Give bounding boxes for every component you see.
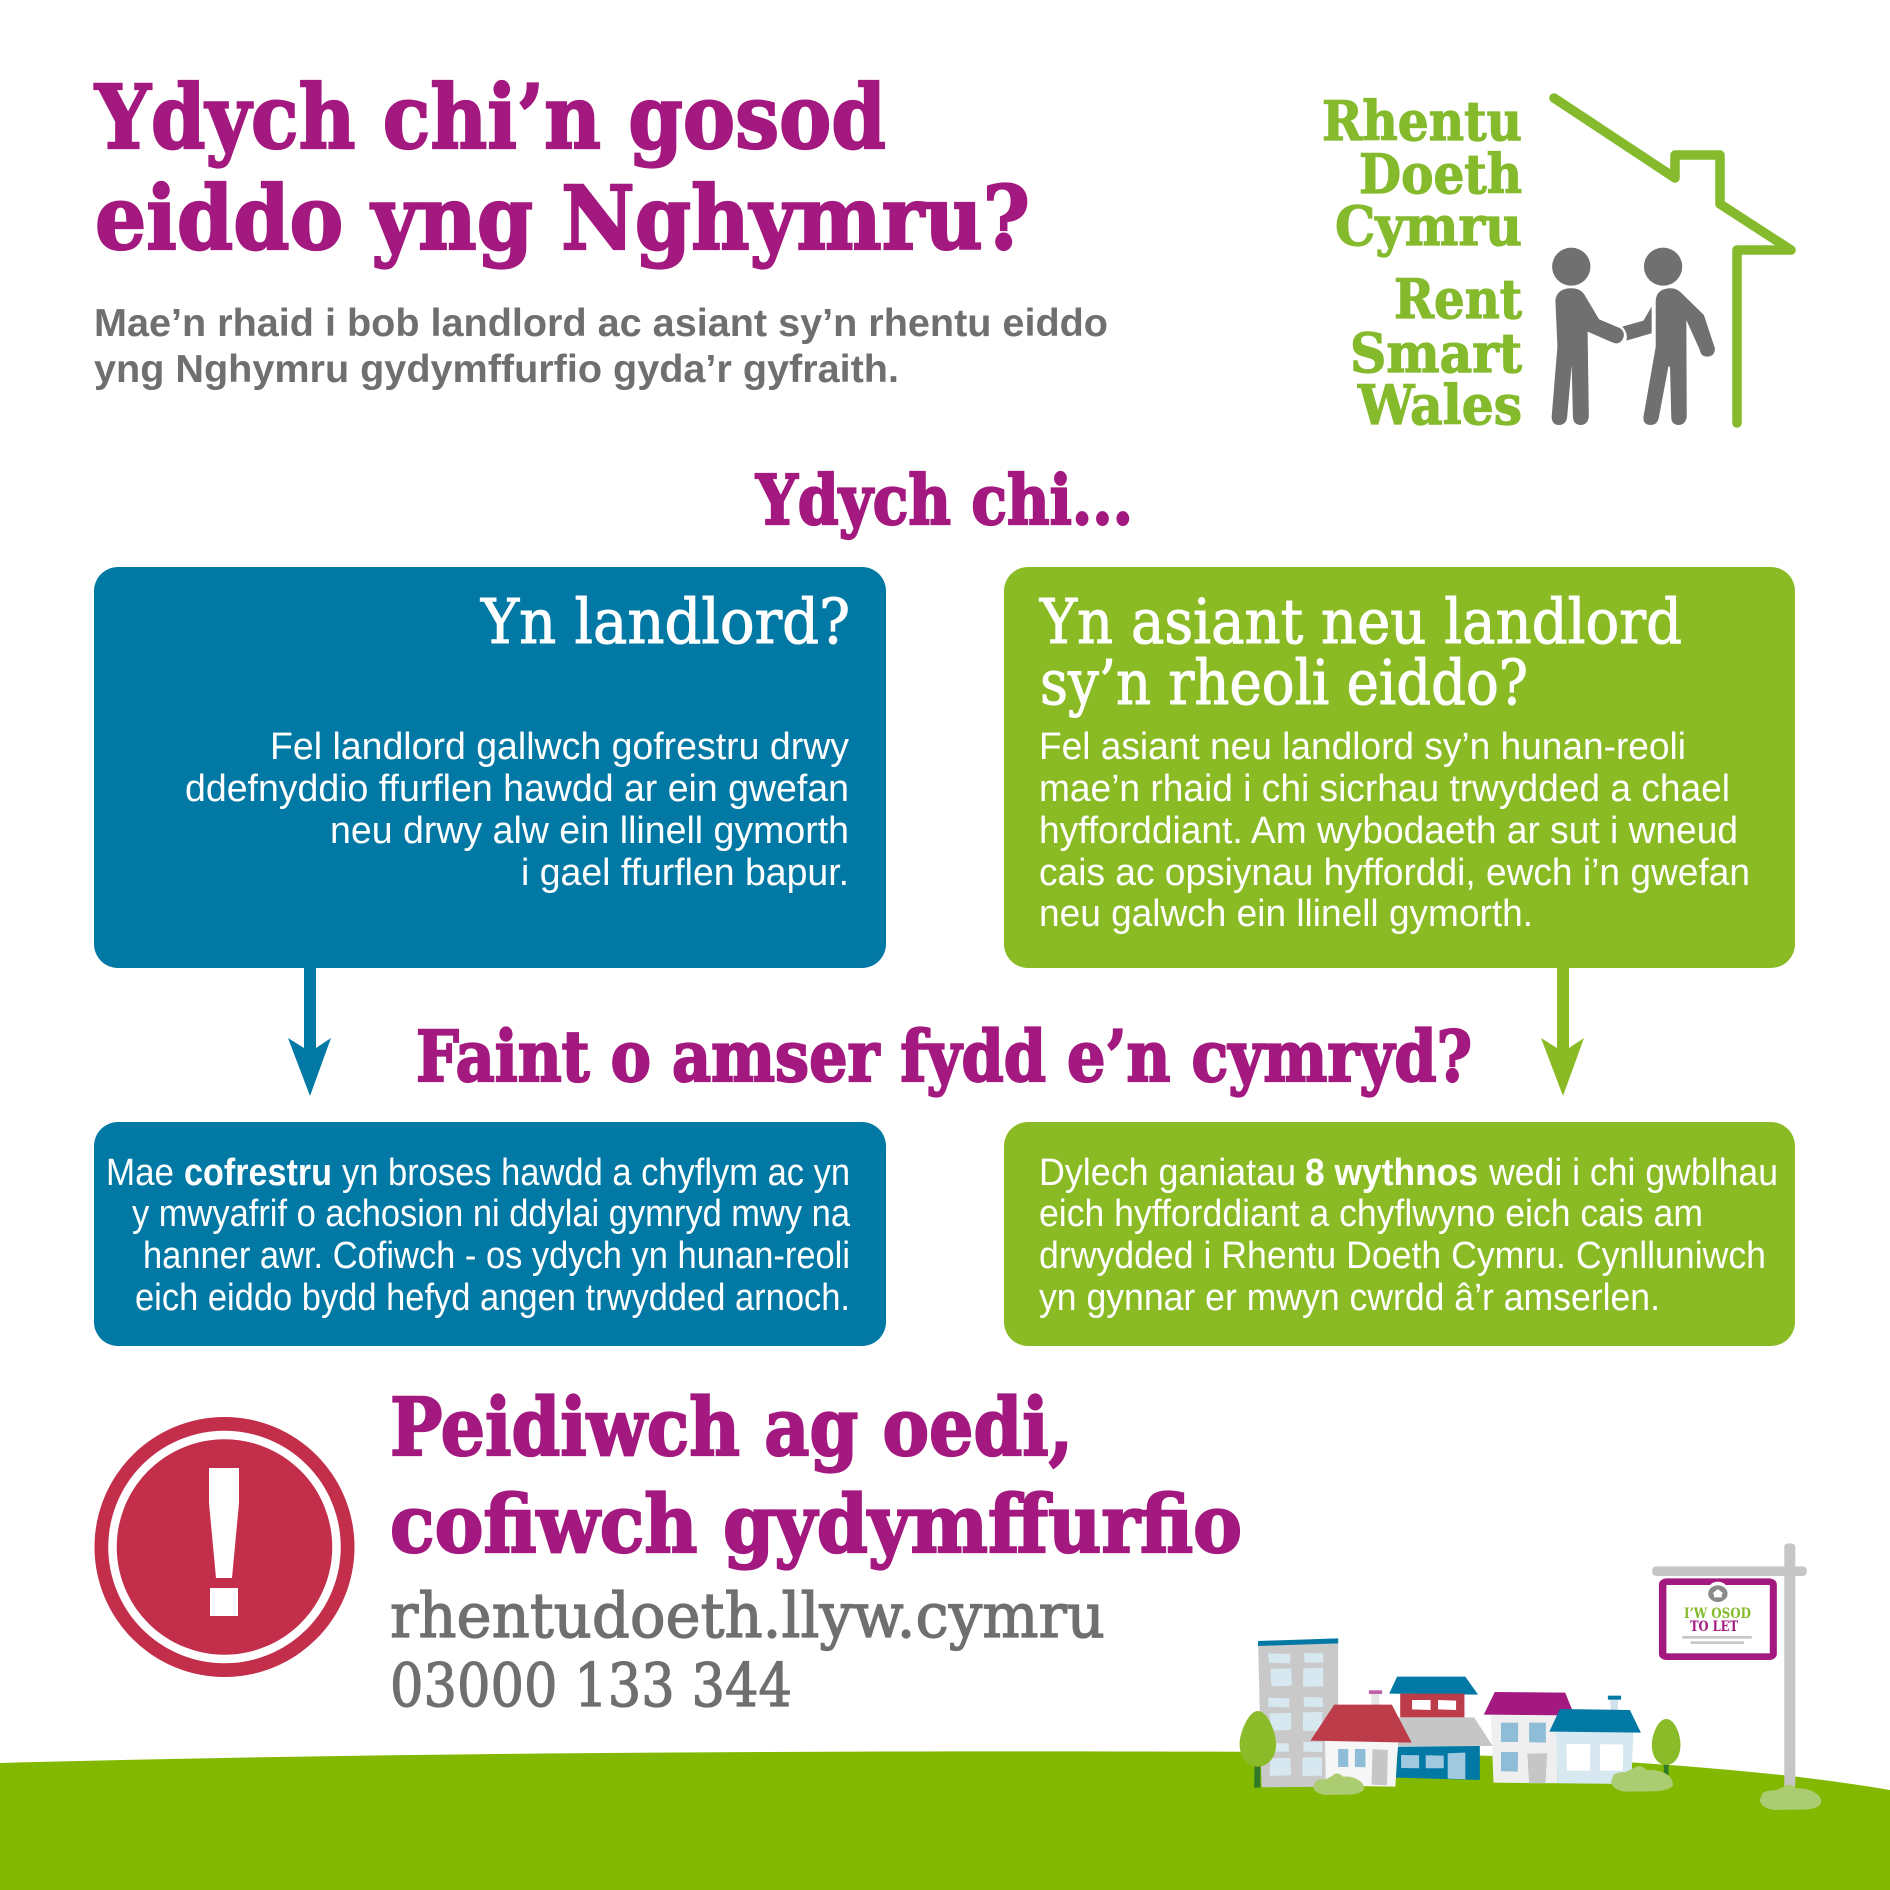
ground (0, 1751, 1890, 1890)
panel text: agent: neu galwch ein llinell gymorth. (1039, 893, 1533, 935)
heading: Peidiwch ag oedi: Peidiwch ag oedi, (390, 1380, 1073, 1474)
logo: Rhentu Doeth Cymru / Rent Smart Wales (1322, 89, 1791, 437)
panel text: landlord: ddefnyddio ffurflen hawdd ar ein gwefan (185, 768, 849, 810)
heading: Ydych chi...: Ydych chi... (755, 461, 1133, 541)
panel text: licence: yn gynnar er mwyn cwrdd â’r amserlen. (1039, 1277, 1660, 1319)
contact details: 03000 133 344 (390, 1651, 792, 1721)
logo text: Wales (1357, 373, 1522, 437)
blue and red building (1389, 1677, 1493, 1780)
panel heading: Yn asiant neu landlord (1039, 585, 1682, 719)
logo text: Cymru (1335, 194, 1522, 258)
heading: Peidiwch ag oedi (390, 1380, 1242, 1571)
illustration: town and sign (1240, 1543, 1821, 1810)
panel: agent (1004, 567, 1795, 968)
subtitle: Mae’n rhaid i bob landlord ac asiant sy’n rhentu eiddo (94, 302, 1108, 345)
arrow: blue (288, 968, 331, 1096)
panel text: registration: eich eiddo bydd hefyd angen trwydded arnoch. (135, 1277, 850, 1319)
blue house (1549, 1696, 1641, 1784)
panel text: registration: cofrestru (184, 1152, 332, 1194)
panel: landlord (94, 567, 886, 968)
panel text: licence: wedi i chi gwblhau (1488, 1152, 1778, 1194)
icon: house outline (1554, 98, 1791, 423)
panel text: agent: cais ac opsiynau hyfforddi, ewch i’n gwefan (1039, 852, 1750, 894)
title (94, 65, 1030, 270)
to let sign board (1659, 1578, 1777, 1660)
panel text: agent: Fel asiant neu landlord sy’n hunan-reoli (1039, 726, 1686, 768)
panel text: landlord: Fel landlord gallwch gofrestru drwy (270, 726, 849, 768)
title: eiddo yng Nghymru? (95, 166, 1030, 270)
panel text: agent (1039, 726, 1750, 935)
tree left (1240, 1711, 1276, 1788)
panel heading: Yn asiant neu landlord: Yn asiant neu landlord (1039, 585, 1682, 658)
panel text: registration (106, 1152, 851, 1319)
logo text: Rhentu (1322, 89, 1522, 153)
panel text: landlord (185, 726, 849, 894)
logo text: Rent (1394, 267, 1522, 331)
title: Ydych chi’n gosod (94, 65, 886, 169)
panel text: licence: eich hyfforddiant a chyflwyno eich cais am (1039, 1193, 1703, 1235)
heading: Faint o amser fydd e'n cymryd?: Faint o amser fydd e’n cymryd? (416, 1015, 1472, 1098)
panel text: registration: Mae (106, 1152, 174, 1194)
panel: licence time (1004, 1122, 1795, 1346)
panel text: landlord: i gael ffurflen bapur. (521, 852, 849, 894)
logo text: Smart (1350, 321, 1522, 385)
sign text (1684, 1606, 1751, 1635)
icon: warning exclamation (94, 1417, 354, 1677)
panel text: registration: y mwyafrif o achosion ni ddylai gymryd mwy na (132, 1193, 851, 1235)
panel text: agent: mae’n rhaid i chi sicrhau trwydded a chael (1039, 768, 1730, 810)
panel heading: Yn landlord?: Yn landlord? (480, 585, 850, 658)
panel text: agent: hyfforddiant. Am wybodaeth ar sut i wneud (1039, 810, 1738, 852)
sign text: TO LET (1690, 1619, 1738, 1635)
white house (1310, 1690, 1412, 1787)
icon: two people shaking hands (1552, 248, 1715, 425)
arrow: green (1541, 968, 1584, 1096)
heading: Peidiwch ag oedi: cofiwch gydymffurfio (390, 1477, 1242, 1571)
contact details (390, 1579, 1105, 1721)
subtitle: yng Nghymru gydymffurfio gyda’r gyfraith. (94, 348, 899, 391)
logo text: Doeth (1359, 142, 1522, 206)
panel text: licence: Dylech ganiatau (1039, 1152, 1296, 1194)
panel text: landlord: neu drwy alw ein llinell gymorth (330, 810, 849, 852)
tree right (1652, 1719, 1680, 1777)
panel text: registration: yn broses hawdd a chyflym ac yn (342, 1152, 850, 1194)
purple house (1484, 1692, 1572, 1783)
sign text: I’W OSOD (1684, 1606, 1751, 1622)
panel text: licence: drwydded i Rhentu Doeth Cymru. Cynlluniwch (1039, 1235, 1766, 1277)
contact details: rhentudoeth.llyw.cymru (390, 1579, 1105, 1652)
panel text: licence: 8 wythnos (1305, 1152, 1478, 1194)
subtitle (94, 302, 1108, 391)
tower block (1258, 1638, 1338, 1787)
sign post (1652, 1543, 1807, 1788)
panel text: licence (1039, 1152, 1778, 1319)
logo text (1322, 89, 1522, 437)
panel heading: Yn asiant neu landlord: sy’n rheoli eiddo? (1040, 646, 1528, 719)
bushes (1313, 1766, 1821, 1810)
panel: registration time (94, 1122, 886, 1346)
panel text: registration: hanner awr. Cofiwch - os ydych yn hunan-reoli (143, 1235, 850, 1277)
